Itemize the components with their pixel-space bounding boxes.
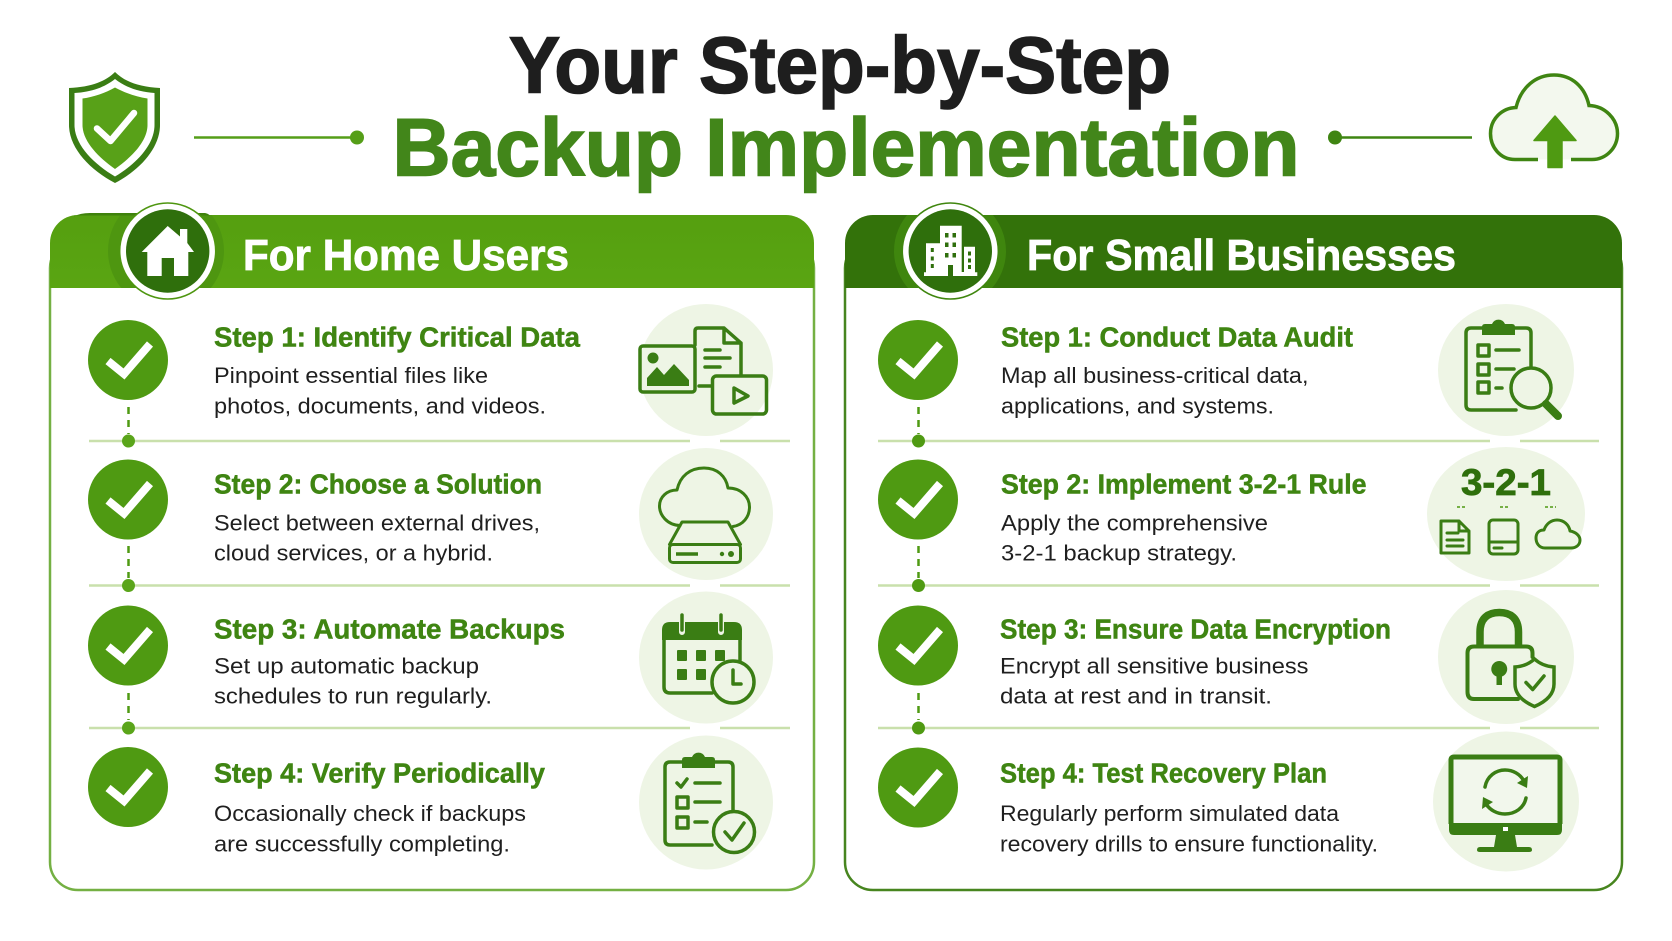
icon: lock and shield	[1438, 590, 1574, 724]
connector: step 3 to 4	[89, 693, 790, 734]
step 1 business: applications, and systems.	[1001, 394, 1274, 418]
icon: files	[639, 304, 773, 436]
step 4 home	[88, 747, 546, 856]
icon: 3-2-1 rule: 3-2-1	[1461, 462, 1551, 503]
connector: step 2 to 3	[89, 546, 790, 592]
step 1 business: Map all business-critical data,	[1001, 363, 1308, 388]
step 1 home: photos, documents, and videos.	[214, 394, 546, 418]
step 3 home: Step 3: Automate Backups	[214, 614, 565, 644]
step 4 home: are successfully completing.	[214, 832, 510, 856]
step 4 business: Step 4: Test Recovery Plan	[1000, 758, 1327, 788]
icon: house badge	[120, 203, 216, 299]
icon: 3-2-1 rule	[1427, 447, 1585, 581]
connector: step 1 to 2 business	[878, 407, 1599, 448]
step 3 business: data at rest and in transit.	[1000, 684, 1272, 708]
icon: calendar and clock	[639, 592, 773, 724]
step 4 business: recovery drills to ensure functionality.	[1000, 832, 1378, 856]
step 3 business: Step 3: Ensure Data Encryption	[1000, 614, 1391, 644]
panel header: home	[50, 213, 814, 288]
step 1 home: Step 1: Identify Critical Data	[214, 322, 581, 352]
step 2 business: Apply the comprehensive	[1001, 510, 1268, 536]
icon: building badge	[902, 203, 998, 299]
step 2 home: Step 2: Choose a Solution	[214, 468, 542, 500]
panel: for small businesses	[845, 195, 1622, 890]
title: Backup Implementation	[392, 102, 1300, 194]
heading: for small businesses: For Small Businesses	[1027, 231, 1456, 280]
connector: right title line	[1328, 130, 1472, 144]
step 1 home: Pinpoint essential files like	[214, 363, 488, 388]
icon: checklist clipboard	[639, 736, 773, 870]
step 1 business	[878, 320, 1353, 418]
title: Your Step-by-Step	[509, 20, 1171, 110]
step 4 business	[878, 748, 1378, 856]
icon: shield	[69, 72, 160, 183]
step 2 business	[878, 460, 1366, 566]
panel header: business	[845, 215, 1622, 288]
step 2 home	[88, 460, 542, 566]
icon: cloud upload	[1490, 75, 1618, 168]
heading: for home users: For Home Users	[243, 231, 569, 280]
step 4 business: Regularly perform simulated data	[1000, 801, 1339, 826]
connector: step 1 to 2	[89, 407, 790, 448]
step 2 home: cloud services, or a hybrid.	[214, 540, 493, 566]
connector: left title line	[194, 130, 364, 144]
connector: step 2 to 3 business	[878, 546, 1599, 592]
step 2 business: Step 2: Implement 3-2-1 Rule	[1001, 468, 1366, 500]
step 3 business: Encrypt all sensitive business	[1000, 654, 1308, 678]
step 3 business	[878, 606, 1391, 708]
panel: for home users	[50, 193, 814, 890]
step 4 home: Occasionally check if backups	[214, 801, 526, 826]
step 2 home: Select between external drives,	[214, 510, 540, 536]
step 2 business: 3-2-1 backup strategy.	[1001, 540, 1237, 566]
connector: step 3 to 4 business	[878, 693, 1599, 734]
icon: cloud and server	[639, 448, 773, 580]
step 3 home	[88, 606, 565, 708]
step 1 business: Step 1: Conduct Data Audit	[1001, 322, 1353, 352]
step 1 home	[88, 320, 581, 418]
step 4 home: Step 4: Verify Periodically	[214, 758, 546, 788]
step 3 home: schedules to run regularly.	[214, 684, 492, 708]
icon: audit clipboard	[1438, 304, 1574, 436]
icon: monitor sync	[1433, 732, 1579, 872]
title	[392, 20, 1300, 194]
step 3 home: Set up automatic backup	[214, 654, 479, 678]
